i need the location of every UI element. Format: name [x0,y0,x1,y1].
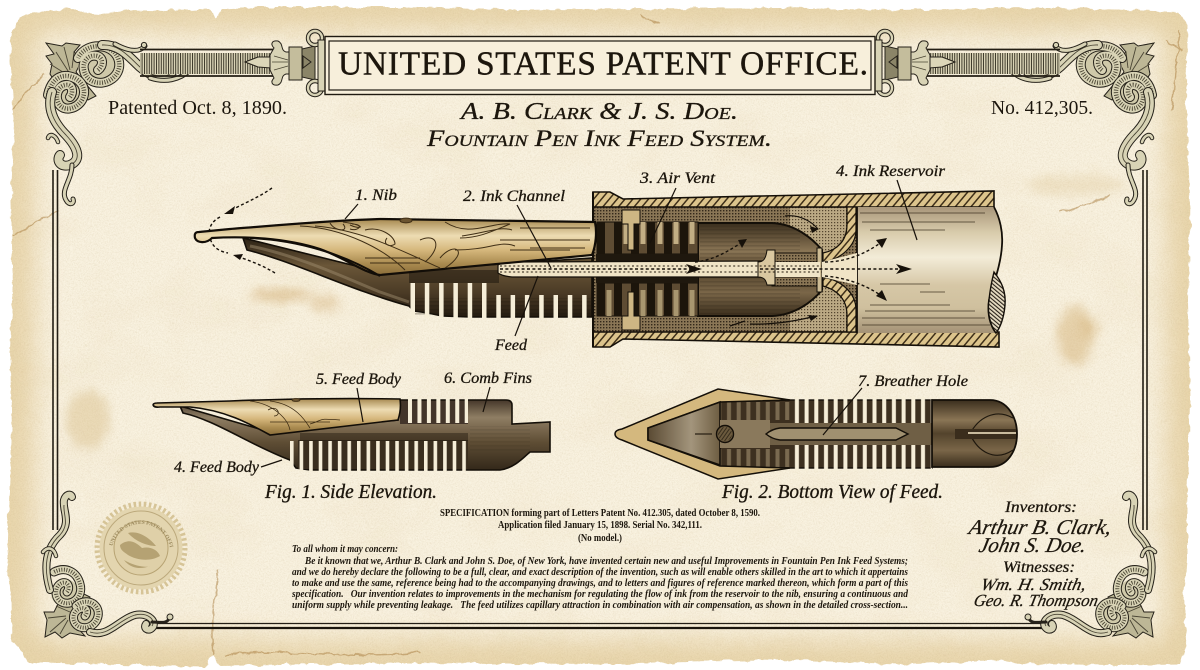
figure 1: side elevation [153,398,550,471]
central ink channel [498,250,857,285]
embossed gold seal [94,502,188,594]
label: feed [494,276,538,354]
seal legend: UNITED STATES PATENT OFFICE [109,520,174,548]
title plate [325,36,875,94]
ink reservoir [857,207,1005,333]
ink flow arrows [500,216,912,326]
nib engraving [300,218,590,270]
caption: figure 2: Fig. 2. Bottom View of Feed. [721,481,943,503]
feed under nib with comb fins [243,238,592,318]
label: feed body lower: 4. Feed Body [174,459,259,476]
small nib [153,398,400,435]
signatures block: Wm. H. Smith, [979,575,1088,594]
label: ink channel [463,188,565,268]
specification body text: uniform supply while preventing leakage. The feed utilizes capillary attraction in combination with air compensation, as shown in the detailed cross-section... [292,600,908,611]
label: comb fins [444,370,532,412]
specification header: SPECIFICATION forming part of Letters Patent No. 412.305, dated October 8, 1590. [440,507,760,519]
caption: figure 1: Fig. 1. Side Elevation. [264,481,437,503]
nib [195,218,596,276]
seal eagle [120,532,160,568]
specification body text: to make and use the same, reference being had to the accompanying drawings, and to letters and figures of reference marked thereon, which form a part of this [292,578,908,589]
signatures block [965,499,1114,610]
specification body text [291,544,909,611]
label: breather hole [823,373,968,435]
label: feed body upper: 5. Feed Body [316,371,401,388]
internal comb fins [596,210,698,330]
specification header: Application filed January 15, 1898. Serial No. 342,111. [498,519,702,531]
label: feed body upper [316,371,401,422]
inventors heading: A. B. Clark & J. S. Doe. [459,99,738,125]
label: feed: Feed [494,337,527,354]
gold collar bands [823,207,856,332]
signatures block: Inventors: [1004,499,1077,516]
signatures block: Geo. R. Thompson [972,591,1100,610]
signatures block: Witnesses: [1003,559,1075,576]
label: nib: 1. Nib [355,187,397,204]
signatures block: Arthur B. Clark, [965,515,1114,539]
specification body text: Be it known that we, Arthur B. Clark and John S. Doe, of New York, have invented certain new and useful Improvements in Fountain Pen Ink Feed Systems; [304,556,908,567]
main cross-section drawing of pen [195,188,1005,347]
label: air vent [639,170,716,243]
gold nib edge [615,389,790,479]
signatures block: John S. Doe. [977,533,1089,557]
specification body text: and we do hereby declare the following to be a full, clear, and exact description of the invention, such as will enable others skilled in the art to which it appertains [292,567,908,578]
label: breather hole: 7. Breather Hole [858,373,968,390]
invention heading: Fountain Pen Ink Feed System. [426,126,772,151]
feed head [932,400,1017,467]
patent number: No. 412,305. [991,98,1093,119]
label: air vent: 3. Air Vent [639,170,716,187]
specification body text: specification. Our invention relates to improvements in the mechanism for regulating the flow of ink from the reservoir to the nib, ensuring a continuous and [291,589,909,600]
barrel section housing [593,191,999,347]
feed comb body [720,397,932,471]
patent date: Patented Oct. 8, 1890. [108,98,287,119]
nib airflow arrows [209,188,275,273]
specification header: (No model.) [578,532,622,544]
label: ink reservoir: 4. Ink Reservoir [836,163,946,180]
specification header [440,507,760,544]
figure 2: bottom view [615,389,1017,479]
label: comb fins: 6. Comb Fins [444,370,532,387]
label: nib [345,187,397,219]
ink chamber dome [698,223,822,316]
central wedge and breather hole [648,402,908,465]
label: ink channel: 2. Ink Channel [463,188,565,205]
feed body [180,398,550,471]
specification body text: To all whom it may concern: [292,544,398,555]
label: ink reservoir [836,163,946,240]
title: UNITED STATES PATENT OFFICE. [338,46,868,82]
